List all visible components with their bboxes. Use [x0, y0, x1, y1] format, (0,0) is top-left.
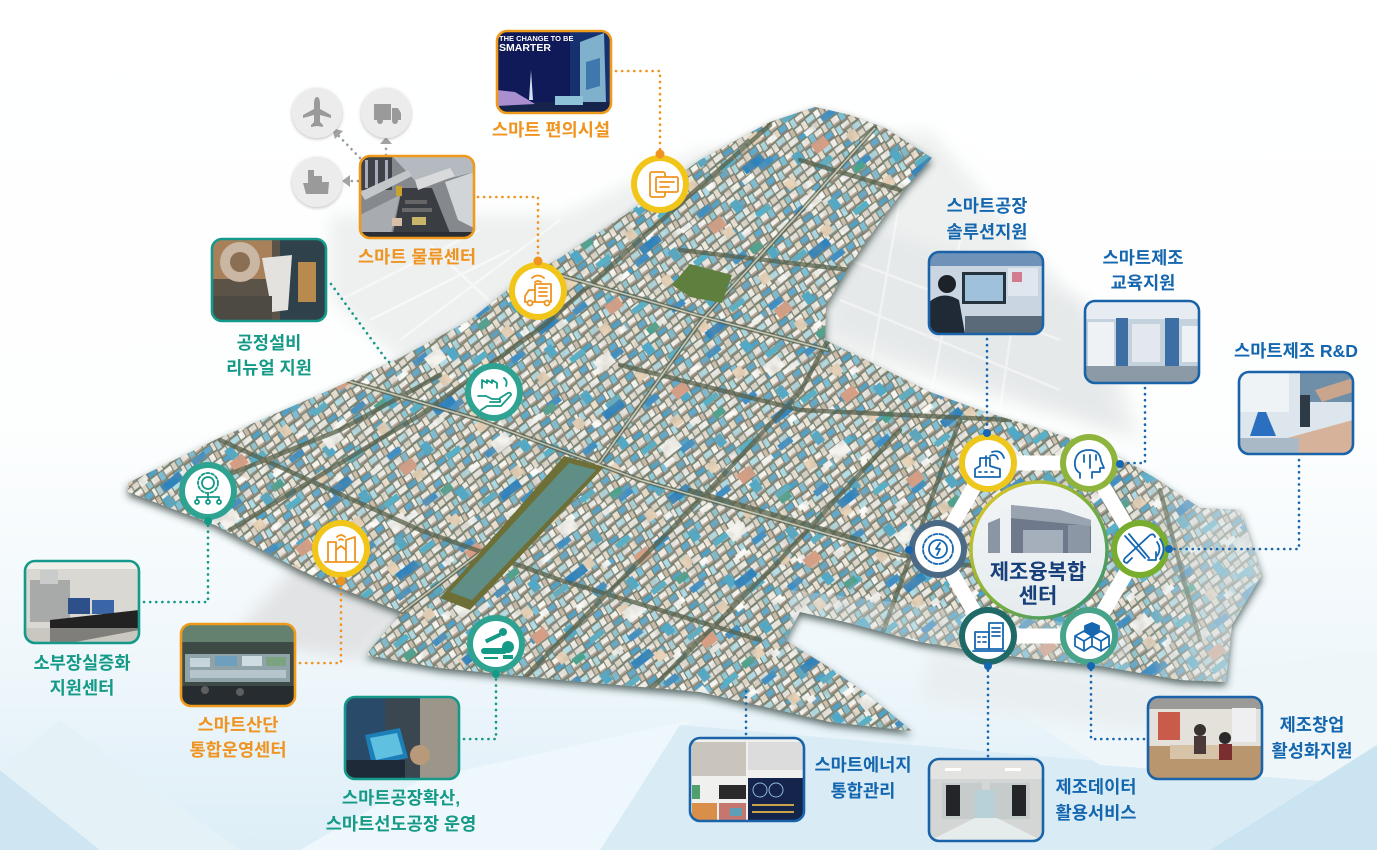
icon badge: hub startup boxes [1060, 607, 1118, 670]
label: startup activation: 제조창업 [1280, 715, 1344, 735]
icon badge: hub energy gear [905, 520, 967, 578]
label: process equipment [226, 333, 312, 378]
label: smart factory solution: 솔루션지원 [947, 222, 1027, 242]
label: education support [1103, 248, 1183, 293]
label: parts localization: 소부장실증화 [33, 653, 131, 673]
ghost city backdrop [230, 130, 1220, 730]
icon badge: hub tools [1111, 520, 1173, 578]
photo card: smart convenience facility: SMARTER [499, 42, 551, 54]
photo card: smart manufacturing R&D [1239, 372, 1353, 454]
center label: 제조융복합 [990, 561, 1086, 584]
icon: delivery truck [361, 88, 411, 138]
icon badge: hub factory [959, 429, 1017, 492]
label: smart factory spread [326, 788, 476, 834]
label: data service: 제조데이터 [1056, 777, 1136, 797]
icon badge: parts network [179, 462, 237, 525]
label: education support: 스마트제조 [1103, 248, 1183, 268]
white hexagon ring [938, 463, 1140, 636]
label: startup activation: 활성화지원 [1272, 741, 1352, 761]
label: smart factory spread: 스마트공장확산, [342, 788, 460, 808]
icon badge: logistics truck [509, 256, 567, 320]
logistics grey arrows [332, 128, 392, 187]
label: education support: 교육지원 [1111, 273, 1175, 293]
photo card: parts localization center [25, 561, 139, 643]
label: data service: 활용서비스 [1056, 803, 1136, 823]
icon badge: hub education head [1060, 434, 1124, 492]
connector dotted lines [144, 71, 1299, 756]
label: startup activation [1272, 715, 1352, 761]
label: R&D: 스마트제조 R&D [1234, 341, 1358, 361]
photo card: startup activation [1148, 697, 1262, 779]
label: smart factory solution [947, 196, 1027, 242]
label: energy management: 통합관리 [831, 781, 895, 801]
label: smart convenience: 스마트 편의시설 [492, 120, 610, 140]
icon: ship [292, 157, 342, 207]
label: smart factory solution: 스마트공장 [947, 196, 1027, 216]
photo card: smart factory solution [929, 252, 1043, 334]
center label [990, 561, 1086, 608]
label: parts localization [33, 653, 131, 698]
label: energy management: 스마트에너지 [814, 755, 912, 775]
photo card: operations center [181, 624, 295, 706]
label: operations center: 스마트산단 [198, 715, 278, 735]
photo card: data service [929, 759, 1043, 841]
faded right part [1139, 472, 1262, 682]
icon badge: equipment renewal [465, 363, 523, 421]
center label: 센터 [1019, 585, 1057, 608]
park [672, 264, 732, 303]
photo card: education support [1085, 301, 1199, 383]
label: data service [1056, 777, 1136, 823]
label: energy management [814, 755, 912, 801]
label: process equipment: 리뉴얼 지원 [226, 358, 312, 378]
icon badge: convenience facility [631, 150, 689, 213]
roads [190, 125, 1200, 690]
hub: manufacturing convergence center [938, 463, 1140, 636]
label: operations center: 통합운영센터 [189, 740, 287, 760]
label: operations center [189, 715, 287, 760]
icon badge: robot arm [467, 615, 525, 678]
photo card: smart convenience facility: THE CHANGE TO BE [499, 34, 573, 43]
label: smart logistics: 스마트 물류센터 [358, 247, 476, 267]
photo card: process equipment renewal [212, 239, 326, 321]
label: smart factory spread: 스마트선도공장 운영 [326, 814, 476, 834]
photo card: smart convenience facility [497, 31, 611, 113]
icon badge: smart city [312, 520, 370, 586]
photo card: smart logistics center [360, 156, 474, 238]
label: process equipment: 공정설비 [237, 333, 301, 353]
center building [988, 505, 1091, 553]
aerial map of the industrial complex [122, 106, 1267, 740]
center circle [971, 482, 1107, 618]
icon: airplane [292, 88, 342, 138]
reservoir pond [440, 456, 604, 610]
photo card: smart factory spread [345, 697, 459, 779]
photo card: energy dashboard [690, 738, 804, 821]
label: parts localization: 지원센터 [50, 678, 114, 698]
icon badge: hub data server [959, 607, 1017, 670]
